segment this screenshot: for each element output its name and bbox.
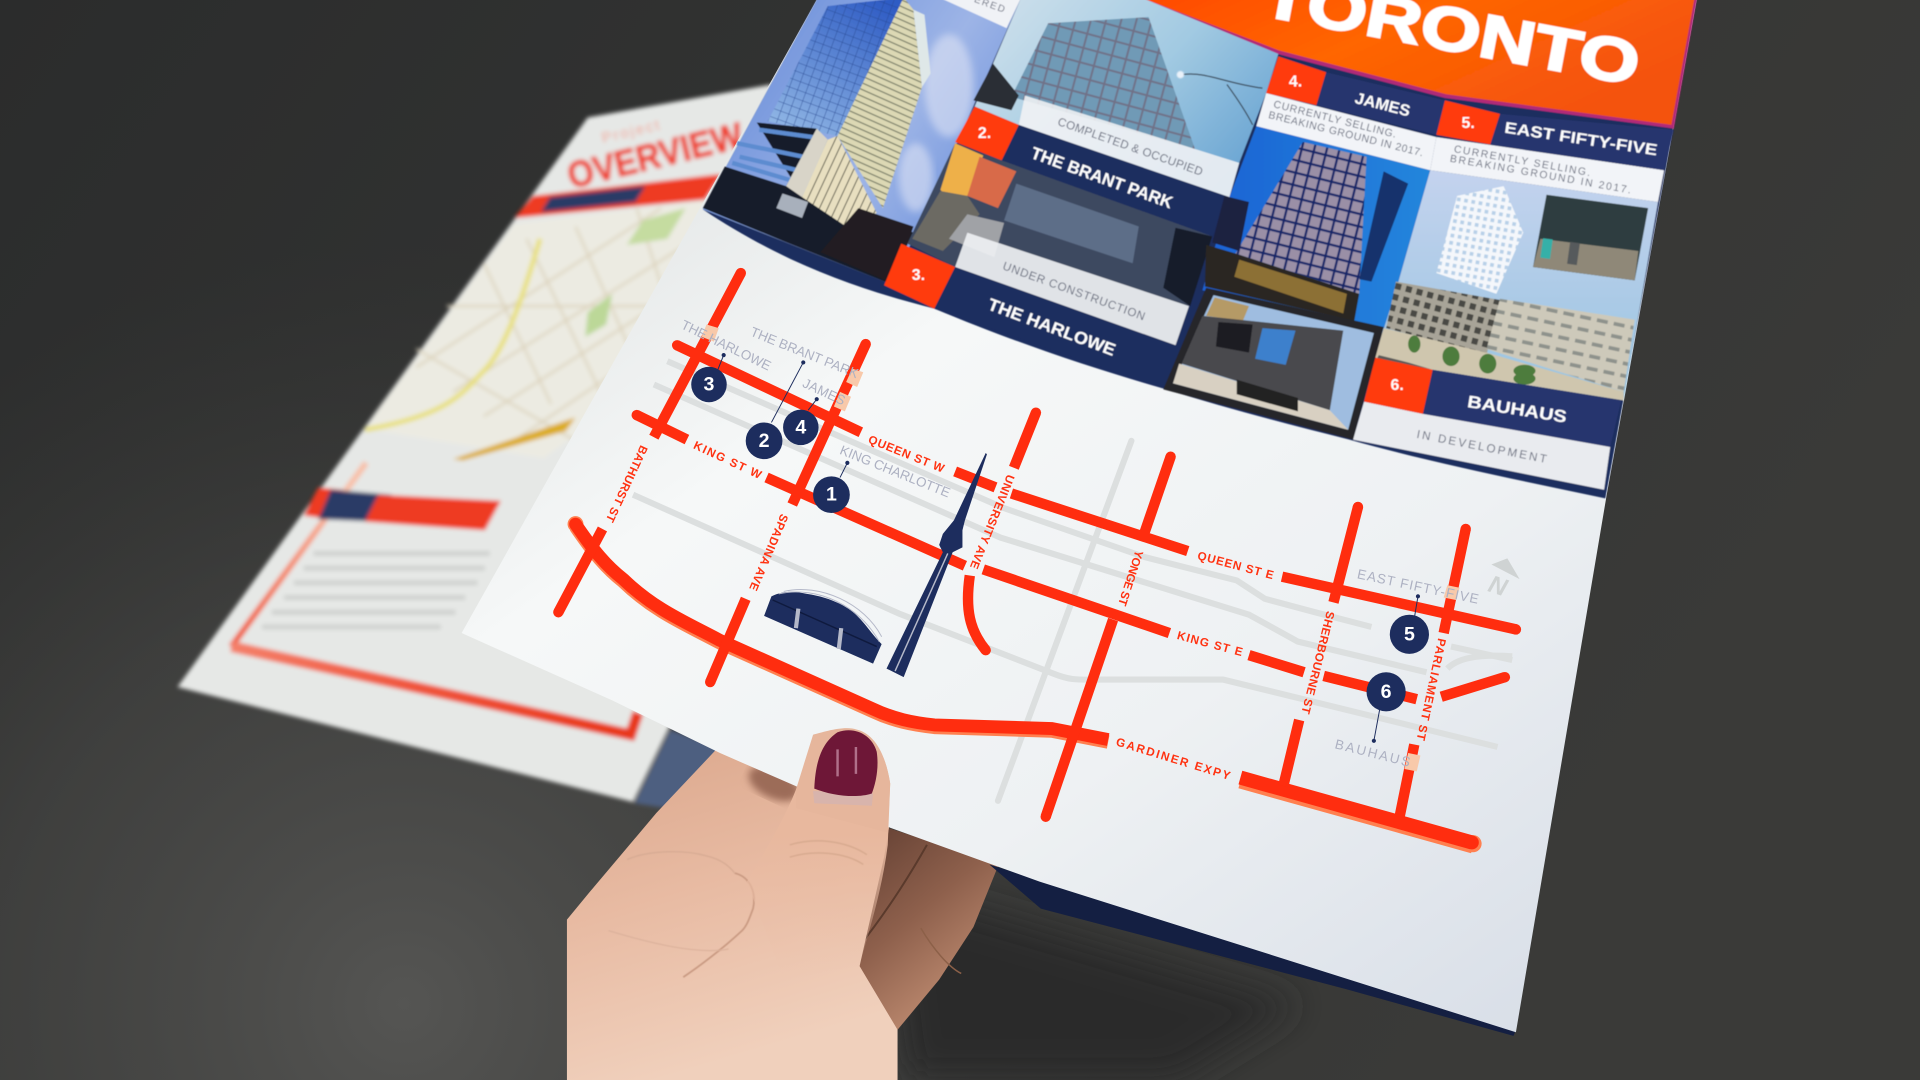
grey minor roads — [633, 361, 1512, 801]
photos 5 and 6: East Fifty-Five, Bauhaus: 6. — [1391, 377, 1404, 394]
street labels: YONGE ST — [1115, 549, 1145, 608]
top header bar — [514, 174, 722, 218]
navy label band — [934, 267, 1176, 388]
dark podium — [703, 122, 913, 283]
building name labels: KING CHARLOTTE — [838, 442, 952, 500]
photo 4: James: 4. — [1289, 74, 1302, 91]
photo 4: James — [1202, 56, 1445, 333]
body copy lines — [262, 553, 490, 627]
Rogers Centre icon — [764, 589, 882, 664]
shadow under front sheet — [882, 882, 1298, 1080]
navy label band — [1490, 114, 1674, 170]
navy back edge of folder — [989, 864, 1516, 1036]
navy label band — [1316, 72, 1445, 135]
street labels: QUEEN ST W — [866, 433, 947, 476]
white caption strip — [1256, 93, 1436, 170]
street labels: SPADINA AVE — [746, 512, 790, 593]
street map — [553, 268, 1521, 852]
caption fragment — [939, 0, 1021, 28]
photo 3: The Harlowe: 3. — [912, 267, 925, 284]
number 6 — [1364, 358, 1433, 414]
photo 2: The Brant Park: 2. — [978, 125, 991, 142]
building name labels: THE HARLOWE — [679, 317, 773, 374]
north arrow — [1485, 558, 1520, 603]
building name labels — [679, 317, 1480, 770]
navy Bauhaus band — [1423, 370, 1621, 447]
nail — [814, 730, 878, 796]
red page frame — [231, 463, 638, 735]
caption lines: BREAKING GROUND IN 2017. — [1267, 110, 1424, 159]
street labels: QUEEN ST E — [1196, 549, 1275, 582]
north arrow: N — [1485, 571, 1511, 603]
numbered map markers: 2 — [759, 430, 770, 452]
photos 5 and 6: East Fifty-Five, Bauhaus — [1353, 100, 1674, 490]
street labels: PARLIAMENT ST — [1413, 637, 1448, 742]
white caption strip — [955, 233, 1189, 345]
caption: UNDER CONSTRUCTION — [1001, 260, 1147, 323]
street labels: GARDINER EXPY — [1114, 736, 1232, 783]
street labels: SHERBOURNE ST — [1298, 610, 1337, 716]
street labels: KING ST W — [691, 439, 764, 482]
number 2 — [955, 107, 1019, 160]
front map sheet — [462, 0, 1697, 1032]
caption strip — [1353, 402, 1610, 490]
white caption strip — [1430, 137, 1664, 202]
photos 5 and 6: East Fifty-Five, Bauhaus: 5. — [1462, 115, 1475, 132]
photo 3: The Harlowe — [884, 143, 1212, 388]
inset presentation centre photo — [1163, 288, 1384, 440]
number 4 — [1266, 56, 1326, 105]
nail cuticle — [813, 791, 873, 806]
building name labels: EAST FIFTY-FIVE — [1356, 566, 1480, 607]
street labels: BATHURST ST — [602, 443, 650, 525]
street labels — [602, 433, 1448, 783]
overview title: OVERVIEW — [563, 115, 747, 196]
caption lines: CURRENTLY SELLING. — [1272, 99, 1397, 141]
orange Toronto header — [1130, 0, 1697, 129]
name: THE HARLOWE — [985, 294, 1118, 360]
numbered map markers: 4 — [795, 416, 806, 438]
Gardiner Expressway — [568, 516, 1482, 852]
numbered map markers — [691, 367, 1429, 711]
thumb and nail — [747, 728, 890, 980]
caption: IN DEVELOPMENT — [1415, 428, 1548, 466]
top photo section — [703, 0, 1697, 498]
name: EAST FIFTY-FIVE — [1503, 120, 1658, 159]
street level — [1375, 328, 1624, 400]
photo 1: King Charlotte tower — [703, 0, 1021, 284]
photo 2: The Brant Park — [955, 0, 1278, 236]
presentation centre inset — [1533, 195, 1648, 280]
name: BAUHAUS — [1466, 391, 1568, 427]
CN Tower icon — [887, 453, 987, 677]
navy folder fold — [634, 730, 759, 813]
black banner — [1216, 322, 1253, 353]
building name labels: JAMES — [800, 375, 848, 408]
numbered map markers: 1 — [826, 484, 837, 506]
building name labels: BAUHAUS — [1333, 736, 1412, 770]
caption: COMPLETED & OCCUPIED — [1056, 115, 1205, 179]
tower poster — [1255, 328, 1296, 365]
red streets — [553, 268, 1521, 822]
blurred locator map — [365, 200, 716, 460]
number 5 — [1436, 100, 1500, 144]
fingers behind the sheet — [845, 814, 999, 1030]
project script line: Project — [600, 118, 661, 147]
caption lines: CURRENTLY SELLING. — [1453, 144, 1591, 179]
leader lines — [716, 354, 1420, 742]
number 3 — [884, 244, 955, 309]
white tower — [1436, 186, 1523, 294]
street labels: UNIVERSITY AVE — [967, 473, 1017, 571]
back brochure, out of focus — [178, 84, 857, 813]
glass curtain wall — [768, 0, 904, 136]
striped facade — [838, 0, 922, 208]
section header bar — [304, 487, 501, 530]
street labels: KING ST E — [1176, 629, 1244, 659]
peach label overlaps — [702, 324, 1460, 771]
building name labels: THE BRANT PARK — [748, 324, 861, 381]
numbered map markers: 6 — [1381, 681, 1392, 703]
name: JAMES — [1353, 90, 1412, 120]
trees — [1408, 336, 1536, 385]
navy label band — [1002, 125, 1229, 236]
hand — [567, 749, 898, 1080]
caption lines: BREAKING GROUND IN 2017. — [1449, 154, 1632, 196]
white caption strip — [1019, 96, 1239, 197]
name: THE BRANT PARK — [1028, 143, 1176, 213]
numbered map markers: 5 — [1404, 623, 1415, 645]
numbered map markers: 3 — [704, 373, 715, 395]
low building — [1386, 282, 1500, 355]
